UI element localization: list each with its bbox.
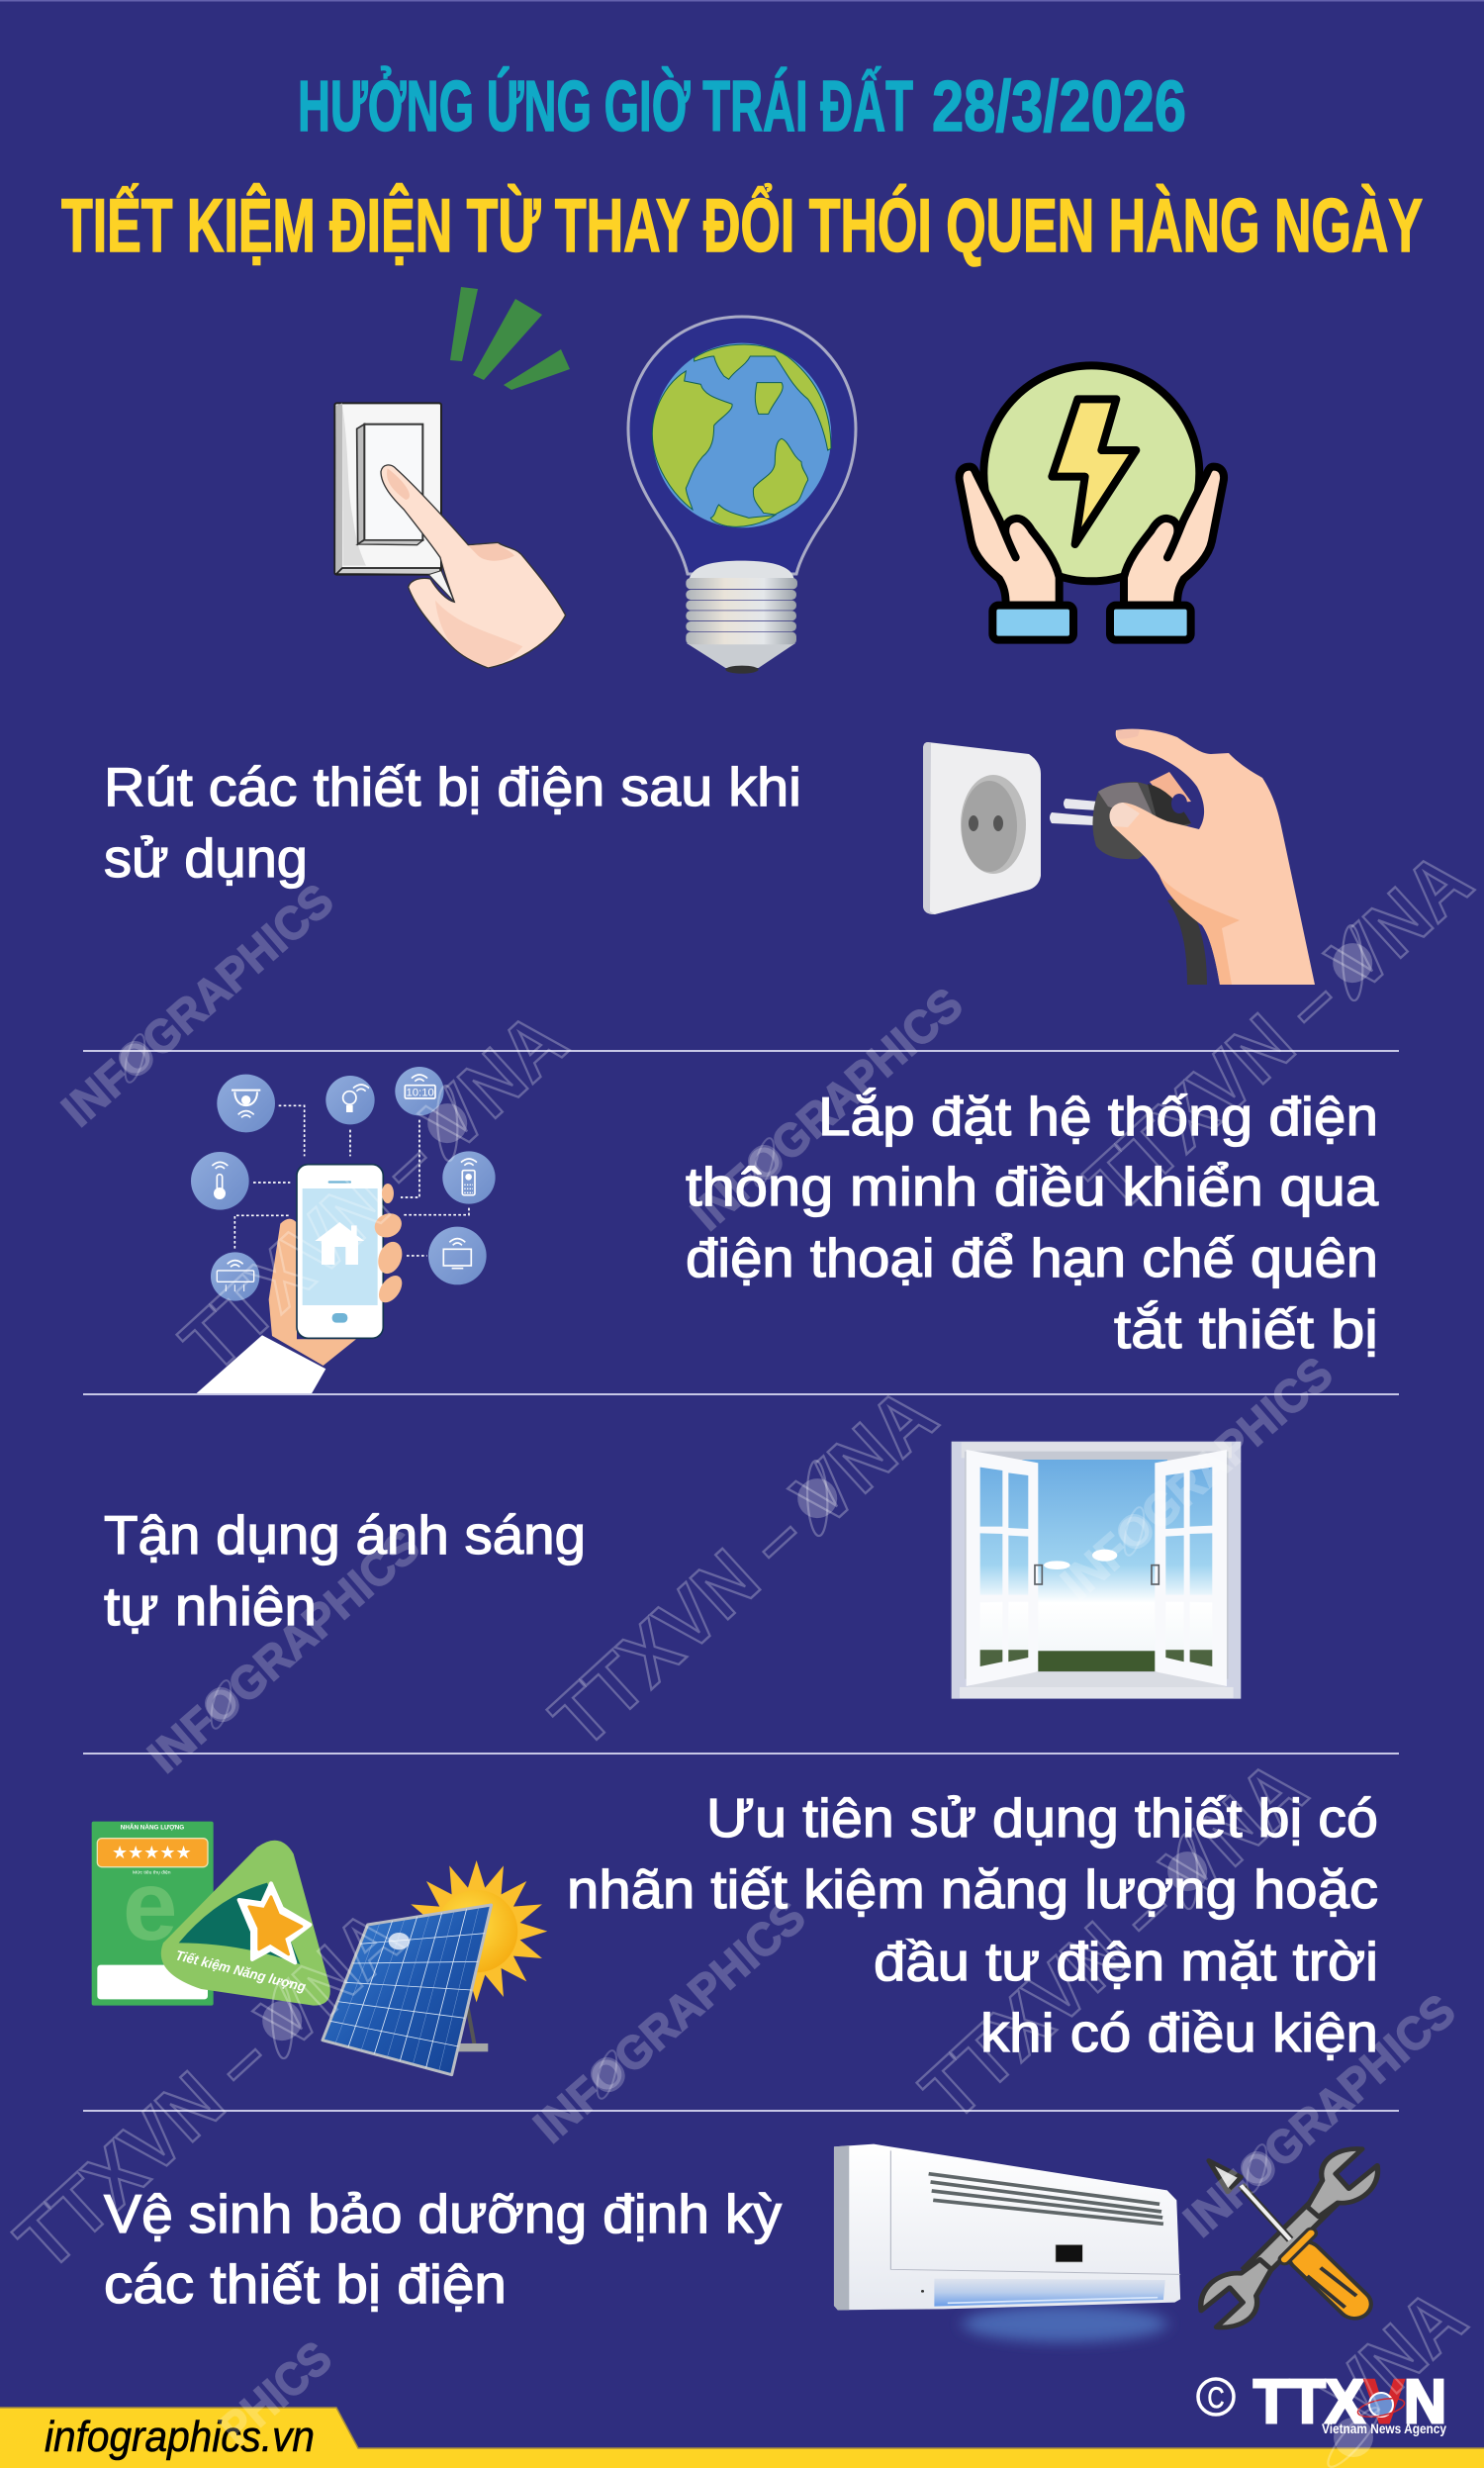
watermarks: TTXVN – VNA	[165, 996, 583, 1389]
icon: energy labels and solar panel: NHÃN NĂNG LƯỢNG	[121, 1822, 184, 1831]
divider	[83, 1393, 1399, 1395]
row 3 text	[104, 1504, 586, 1637]
watermarks: INFOGRAPHICS	[51, 874, 343, 1136]
watermarks: TTXVN – VNA	[905, 1744, 1323, 2137]
icon: energy labels and solar panel: ★★★★★	[112, 1843, 192, 1862]
row 1 text	[104, 756, 801, 889]
row 4 text: Ưu tiên sử dụng thiết bị có	[706, 1787, 1378, 1849]
row 3 text: Tận dụng ánh sáng	[104, 1504, 586, 1566]
row 2 text: Lắp đặt hệ thống điện	[818, 1086, 1378, 1147]
icon: energy labels and solar panel: Tiết kiệm Năng lượng	[174, 1946, 308, 1995]
watermarks: PHICS	[210, 2330, 341, 2455]
icon: energy labels and solar panel	[92, 1822, 547, 2075]
icon: green click rays	[450, 287, 570, 390]
watermarks: INFOGRAPHICS	[523, 1890, 815, 2152]
divider	[83, 2110, 1399, 2112]
row 2 text	[686, 1086, 1378, 1360]
icon: smart home phone	[191, 1067, 496, 1393]
divider	[83, 1050, 1399, 1052]
icon: air conditioner and tools	[834, 2144, 1378, 2342]
icon: energy labels and solar panel: Mức tiêu thụ điện	[133, 1870, 171, 1876]
row 4 text: khi có điều kiện	[980, 2002, 1378, 2063]
footer site name: infographics.vn	[45, 2413, 315, 2461]
row 2 text: tắt thiết bị	[1114, 1298, 1378, 1360]
watermarks: TTXVN – VNA	[535, 1371, 953, 1764]
row 5 text: Vệ sinh bảo dưỡng định kỳ	[104, 2183, 783, 2244]
logo: TTXVN: C	[1207, 2382, 1225, 2415]
divider	[83, 1753, 1399, 1755]
icon: hands holding energy	[960, 365, 1224, 640]
row 4 text: đầu tư điện mặt trời	[874, 1931, 1378, 1992]
row 4 text: nhãn tiết kiệm năng lượng hoặc	[567, 1858, 1378, 1920]
title: line 1: HƯỞNG ỨNG GIỜ TRÁI ĐẤT	[298, 66, 913, 146]
icon: hand pressing light switch	[334, 403, 566, 668]
row 5 text	[104, 2183, 783, 2315]
icon: earth light bulb	[628, 317, 856, 674]
row 4 text	[567, 1787, 1378, 2063]
row 1 text: sử dụng	[104, 827, 308, 889]
icon: smart home phone: 10:10	[406, 1087, 434, 1098]
icon: hand unplugging from socket	[923, 729, 1315, 985]
watermarks: TTXVN – VNA	[0, 1893, 417, 2287]
footer bar	[0, 2408, 1484, 2468]
row 3 text: tự nhiên	[104, 1575, 317, 1637]
logo: TTXVN: TTXVN	[1253, 2368, 1446, 2436]
title: line 1: 28/3/2026	[932, 67, 1186, 146]
row 1 text: Rút các thiết bị điện sau khi	[104, 756, 801, 817]
row 5 text: các thiết bị điện	[104, 2253, 507, 2315]
row 2 text: thông minh điều khiển qua	[686, 1156, 1378, 1217]
logo: TTXVN: Vietnam News Agency	[1322, 2421, 1446, 2436]
icon: open window	[952, 1442, 1241, 1699]
watermarks: INFOGRAPHICS	[138, 1520, 429, 1782]
watermarks: INFOGRAPHICS	[1051, 1347, 1343, 1609]
watermarks	[0, 835, 1484, 2468]
watermarks: INFOGRAPHICS	[681, 978, 973, 1240]
icon: energy labels and solar panel: e	[123, 1851, 177, 1961]
row 2 text: điện thoại để hạn chế quên	[686, 1227, 1378, 1288]
watermarks: INFOGRAPHICS	[1173, 1984, 1465, 2246]
